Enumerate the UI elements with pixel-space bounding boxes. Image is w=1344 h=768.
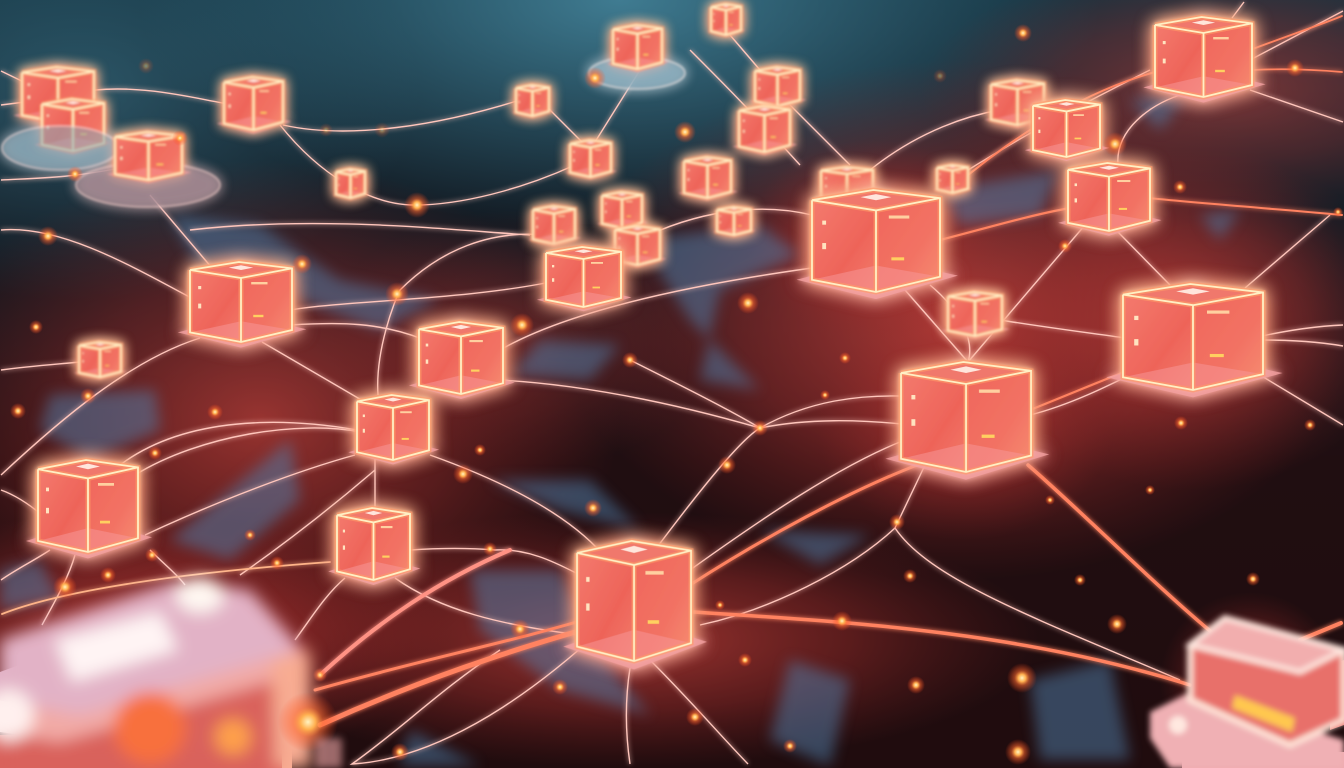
cube: top right (1143, 17, 1266, 103)
cube: far small 5 (733, 106, 797, 155)
cube: far small 2 (565, 140, 617, 180)
cube: far small 11 (610, 226, 666, 268)
cube: top left single (217, 77, 291, 134)
cube: far small 6 (678, 157, 738, 201)
cube: top right small (1025, 100, 1109, 161)
cube: upper right medium (1058, 163, 1161, 236)
cube: far small 1 (512, 85, 554, 118)
cube: mid left (348, 395, 439, 465)
blurred foreground cube: bottom right (1150, 618, 1344, 768)
cube: large right (1106, 284, 1283, 397)
cube: top center group (589, 25, 685, 89)
cube: upper left front (35, 99, 113, 155)
cube: small (333, 169, 369, 200)
cube: centre top (537, 247, 632, 311)
cube: left small (74, 342, 127, 379)
cube: far small 10 (597, 192, 648, 231)
cube: far small 4 (750, 67, 806, 109)
cube: bottom centre (563, 541, 707, 669)
cube: far small 9 (528, 206, 581, 247)
cube: centre left (409, 322, 515, 399)
cube: far left (26, 460, 152, 558)
cube: lower left (328, 508, 420, 585)
cube: far small 12 (713, 207, 756, 237)
foreground cubes: sharp (26, 17, 1283, 669)
cube: far small 7 (815, 167, 880, 204)
cube: upper left (13, 67, 104, 126)
background cubes: soft (2, 4, 1051, 379)
bright flare at cube corner (278, 692, 342, 768)
cube: large centre right (885, 362, 1049, 480)
cube: upper right soft (985, 80, 1051, 128)
cube: mid right dim (942, 292, 1010, 339)
cube: left large (178, 262, 306, 348)
cube: large upper centre (797, 190, 958, 299)
blurred foreground cube: bottom left (0, 577, 312, 768)
cube: far small 8 (933, 165, 972, 195)
cube: far small 3 (707, 4, 745, 37)
cube: upper left on disc (2, 126, 220, 207)
